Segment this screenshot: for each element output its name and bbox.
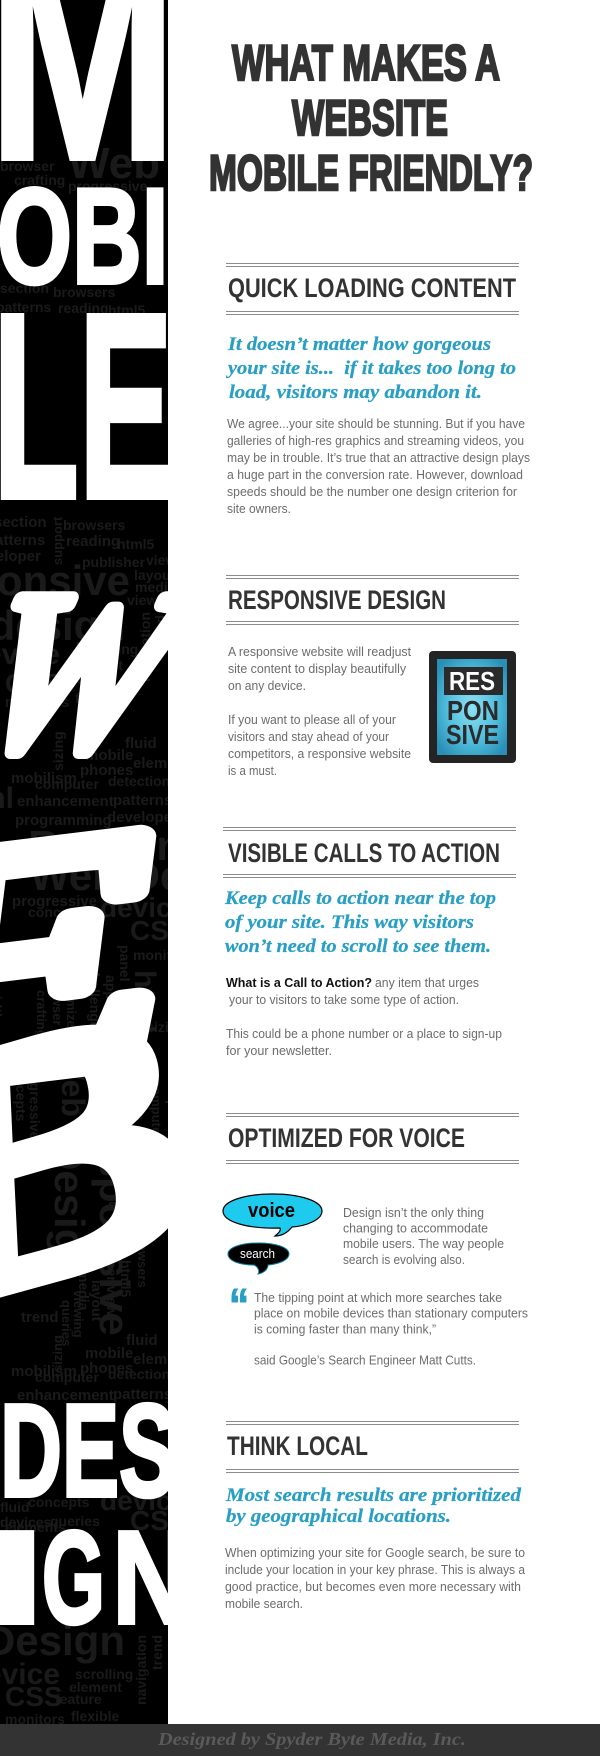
body text: your to visitors to take some type of action. xyxy=(229,992,459,1007)
word cloud background: scrolling xyxy=(75,1666,133,1682)
word cloud background: queries xyxy=(59,1300,74,1346)
word cloud background: panel xyxy=(117,945,133,982)
word cloud background: publisher xyxy=(82,554,146,570)
word cloud background: mobilism xyxy=(11,1363,77,1380)
quote text xyxy=(254,1290,528,1368)
word cloud background: scrolling xyxy=(80,641,138,657)
body text: visitors and stay ahead of your xyxy=(228,729,390,744)
word cloud background: trend xyxy=(149,1635,165,1670)
panel: left black column with big type xyxy=(0,0,168,1724)
word cloud background: navigation xyxy=(133,1635,149,1705)
panel: think local xyxy=(225,1421,526,1611)
word cloud background: mobile xyxy=(85,747,133,764)
word cloud background: media xyxy=(135,579,176,595)
footer bar xyxy=(0,1724,600,1756)
panel: left black column with big type: G xyxy=(42,1504,105,1651)
word cloud background: concepts xyxy=(28,904,90,920)
icon: responsive tablet: PON xyxy=(447,695,499,726)
body text: speeds should be the number one design criterion for xyxy=(227,484,518,499)
word cloud background: queries xyxy=(50,1513,100,1529)
word cloud background: Design xyxy=(46,1140,93,1280)
quote text: The tipping point at which more searches take xyxy=(254,1290,502,1305)
word cloud background: concepts xyxy=(28,1494,90,1510)
body text: any item that urges xyxy=(375,975,479,990)
quote text: is coming faster than many think,” xyxy=(254,1322,436,1336)
icon: search speech bubble: search xyxy=(240,1246,275,1261)
tagline: your site is... if it takes too long to xyxy=(226,358,516,379)
body text xyxy=(343,1205,504,1267)
icon: voice speech bubble xyxy=(223,1194,322,1236)
body text: changing to accommodate xyxy=(343,1220,488,1236)
word cloud background: trend xyxy=(21,1309,58,1326)
word cloud background: elements xyxy=(5,1519,66,1535)
word cloud background: sizing xyxy=(50,1335,65,1372)
quote text: place on mobile devices than stationary computers xyxy=(254,1306,528,1320)
body text: When optimizing your site for Google search, be sure to xyxy=(225,1545,525,1560)
word cloud background: layout xyxy=(134,567,176,583)
icon: responsive tablet: SIVE xyxy=(446,719,499,750)
body text: include your location in your key phrase. This is always a xyxy=(225,1562,526,1577)
body text: mobile search. xyxy=(225,1596,303,1611)
body text: What is a Call to Action? xyxy=(226,975,372,990)
body text: search is evolving also. xyxy=(343,1252,465,1267)
heading: think local: THINK LOCAL xyxy=(227,1431,368,1461)
word cloud background: fluid xyxy=(0,1499,30,1515)
word cloud background: CSS xyxy=(130,915,188,946)
icon: voice speech bubble: voice xyxy=(248,1200,295,1222)
tagline: load, visitors may abandon it. xyxy=(229,382,482,403)
word cloud background: programming xyxy=(15,812,112,829)
word cloud background: apps xyxy=(103,975,119,1008)
word cloud background: optimize xyxy=(64,975,79,1028)
tagline: Most search results are prioritized xyxy=(225,1485,522,1506)
word cloud background: CSS xyxy=(130,1505,188,1536)
word cloud background: progressive xyxy=(27,1060,43,1140)
word cloud background: section xyxy=(0,280,49,296)
body text: a huge part in the conversion rate. However, download xyxy=(227,467,523,482)
body text: may be in trouble. It’s true that an attractive design plays xyxy=(227,450,530,465)
heading: quick loading content: QUICK LOADING CONTENT xyxy=(228,273,516,303)
word cloud background: reading xyxy=(58,300,109,316)
word cloud background: site xyxy=(74,1043,100,1060)
word cloud background: feature xyxy=(70,670,117,686)
body text: This could be a phone number or a place to sign-up xyxy=(226,1026,502,1041)
word cloud background: detection xyxy=(108,1366,170,1382)
word cloud background: Responsive xyxy=(91,1100,138,1336)
word cloud background: mobilism xyxy=(11,770,77,787)
word cloud background: progressive xyxy=(68,178,148,194)
word cloud background: phones xyxy=(80,762,133,779)
word cloud background: device xyxy=(100,892,187,923)
tagline: of your site. This way visitors xyxy=(225,912,474,933)
word cloud background: detection xyxy=(108,773,170,789)
tagline xyxy=(226,334,516,403)
quote text: said Google’s Search Engineer Matt Cutts. xyxy=(254,1352,476,1368)
big script word: WEB xyxy=(0,591,168,1298)
word cloud background: html5 xyxy=(118,1260,134,1298)
word cloud background: browser xyxy=(50,975,65,1026)
word cloud background xyxy=(0,148,168,1724)
word cloud background: support xyxy=(108,1197,164,1214)
body text xyxy=(228,644,411,778)
word cloud background: reading xyxy=(66,533,120,550)
word cloud background: viewing xyxy=(71,1290,86,1338)
panel: left black column with big type: N xyxy=(112,1504,190,1651)
word cloud background: challenge xyxy=(87,965,103,1030)
panel: quick loading content xyxy=(226,263,530,516)
word cloud background: phones xyxy=(165,1100,181,1150)
body text: for your newsletter. xyxy=(226,1043,332,1058)
body text: on any device. xyxy=(228,678,306,693)
word cloud background: mobile xyxy=(85,1345,133,1362)
icon: search speech bubble xyxy=(228,1243,289,1274)
word cloud background: CSS xyxy=(5,1681,63,1712)
heading: visible calls to action: VISIBLE CALLS TO ACTION xyxy=(228,838,500,868)
word cloud background: crafting xyxy=(14,172,65,188)
word cloud background: support xyxy=(50,516,65,565)
word cloud background: browsers xyxy=(53,284,115,300)
word cloud background: developer xyxy=(107,809,178,826)
body text: If you want to please all of your xyxy=(228,712,397,727)
panel: optimized for voice xyxy=(223,1113,528,1368)
body text: We agree...your site should be stunning. But if you have xyxy=(227,416,525,431)
title: WEBSITE xyxy=(292,90,448,146)
word cloud background: flexible xyxy=(75,690,123,706)
body text: site owners. xyxy=(227,501,291,516)
body text: galleries of high-res graphics and streaming videos, you xyxy=(227,433,524,448)
icon: responsive tablet xyxy=(429,651,516,763)
word cloud background: Web xyxy=(68,139,160,188)
word cloud background: enhancement xyxy=(17,1387,114,1404)
word cloud background: elements xyxy=(133,1351,198,1368)
body text: is a must. xyxy=(228,763,277,778)
word cloud background: elements xyxy=(133,755,198,772)
word cloud background: monitors xyxy=(5,1711,65,1727)
word cloud background: feature xyxy=(55,1691,102,1707)
body text: A responsive website will readjust xyxy=(228,644,411,659)
word cloud background: monitors xyxy=(5,694,69,711)
word cloud background: browsers xyxy=(63,517,125,533)
word cloud background: trend xyxy=(152,615,168,650)
word cloud background: progressive xyxy=(12,893,97,910)
title xyxy=(209,35,533,201)
word cloud background: element xyxy=(70,657,123,673)
word cloud background: navigation xyxy=(137,612,153,682)
word cloud background: fluid xyxy=(125,735,157,752)
body text xyxy=(227,416,530,516)
word cloud background: html5 xyxy=(108,302,146,318)
word cloud background: device xyxy=(100,1485,187,1516)
big word: DESIGN xyxy=(0,1402,168,1626)
word cloud background: elements xyxy=(132,1060,148,1121)
body text xyxy=(225,1545,526,1611)
word cloud background: browsers xyxy=(135,1230,150,1288)
word cloud background: computer xyxy=(149,1080,164,1139)
word cloud background: Web xyxy=(55,1050,91,1117)
icon: responsive tablet: RES xyxy=(449,666,495,696)
word cloud background: Responsive xyxy=(28,822,264,869)
body text: good practice, but becomes even more necessary with xyxy=(225,1579,521,1594)
word cloud background: crafting xyxy=(34,990,49,1038)
tagline: won’t need to scroll to see them. xyxy=(225,936,491,957)
footer bar: Designed by Spyder Byte Media, Inc. xyxy=(157,1729,466,1749)
word cloud background: monitors xyxy=(133,947,193,963)
word cloud background: layout xyxy=(89,1280,105,1322)
heading: responsive design: RESPONSIVE DESIGN xyxy=(228,585,446,615)
word cloud background: patterns xyxy=(113,792,172,809)
word cloud background: computer xyxy=(35,1369,99,1385)
word cloud background: her view xyxy=(104,1260,120,1316)
word cloud background: enhancement xyxy=(17,793,114,810)
word cloud background: view xyxy=(146,552,176,568)
word cloud background: Web Design xyxy=(30,852,270,899)
word cloud background: flexible xyxy=(71,1708,119,1724)
tagline xyxy=(224,888,496,957)
body text xyxy=(226,975,502,1058)
word cloud background: element xyxy=(69,1679,122,1695)
tagline: It doesn’t matter how gorgeous xyxy=(227,334,491,355)
word cloud background: resizing xyxy=(133,1019,186,1035)
word cloud background: devices xyxy=(0,1514,52,1530)
body text: competitors, a responsive website xyxy=(228,746,411,761)
word cloud background: html xyxy=(128,970,161,1033)
body text: mobile users. The way people xyxy=(343,1236,504,1251)
word cloud background: patterns xyxy=(113,1386,172,1403)
word cloud background: sizing xyxy=(50,731,66,771)
word cloud background: CSS xyxy=(5,668,63,699)
body text: site content to display beautifully xyxy=(228,661,406,676)
word cloud background: media xyxy=(76,1270,92,1311)
word cloud background: concepts xyxy=(13,1060,29,1122)
word cloud background: computer xyxy=(35,776,99,792)
big word: MOBILE xyxy=(0,0,168,500)
tagline: by geographical locations. xyxy=(226,1506,451,1527)
word cloud background: browser xyxy=(0,158,55,174)
heading: optimized for voice: OPTIMIZED FOR VOICE xyxy=(228,1123,465,1153)
word cloud background: viewing xyxy=(127,592,178,608)
panel: visible calls to action xyxy=(223,827,516,1058)
icon: quotation mark: “ xyxy=(229,1279,249,1331)
word cloud background: phones xyxy=(80,1360,133,1377)
body text: Design isn’t the only thing xyxy=(343,1205,484,1220)
tagline: Keep calls to action near the top xyxy=(224,888,496,909)
panel: responsive design xyxy=(226,575,519,778)
word cloud background: html5 xyxy=(117,536,155,552)
word cloud background: programming xyxy=(115,1045,131,1135)
word cloud background: fluid xyxy=(126,1332,158,1349)
tagline xyxy=(225,1485,522,1527)
